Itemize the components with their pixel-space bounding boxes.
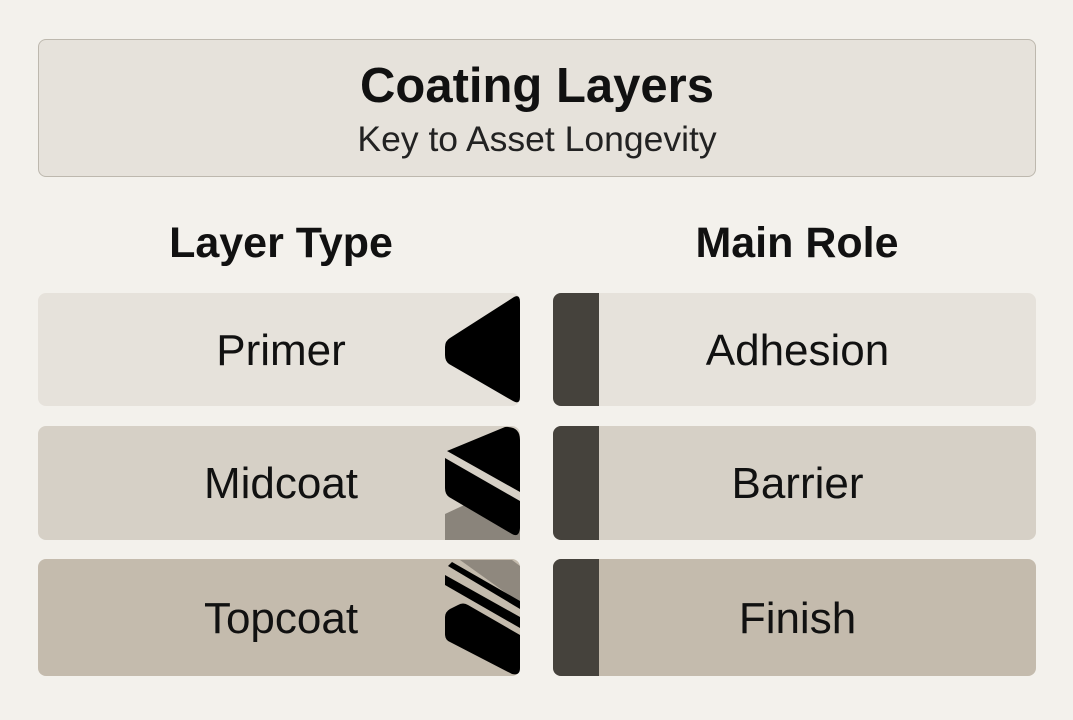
title: Coating Layers (360, 59, 714, 113)
dark bar (553, 293, 599, 406)
column header: layer type: Layer Type (169, 219, 393, 267)
subtitle: Key to Asset Longevity (357, 119, 717, 159)
icon: topcoat layers (445, 560, 520, 674)
icon: primer wedge (445, 296, 520, 402)
row 2 right: barrier (553, 426, 1036, 540)
row 1 right: adhesion: Adhesion (706, 326, 889, 374)
header panel (38, 39, 1036, 177)
row 1 left: primer: Primer (216, 326, 346, 374)
row 3 left: topcoat (38, 559, 520, 676)
row 3 right: finish: Finish (739, 594, 856, 642)
dark bar (553, 426, 599, 540)
column header: main role: Main Role (695, 219, 899, 267)
row 2 left: midcoat: Midcoat (204, 459, 358, 508)
row 3 right: finish (553, 559, 1036, 676)
dark bar (553, 559, 599, 676)
row 1 left: primer (38, 293, 520, 406)
row 3 left: topcoat: Topcoat (204, 594, 358, 642)
row 2 left: midcoat (38, 426, 520, 540)
icon: midcoat layers (445, 427, 520, 540)
row 2 right: barrier: Barrier (731, 459, 864, 508)
row 1 right: adhesion (553, 293, 1036, 406)
